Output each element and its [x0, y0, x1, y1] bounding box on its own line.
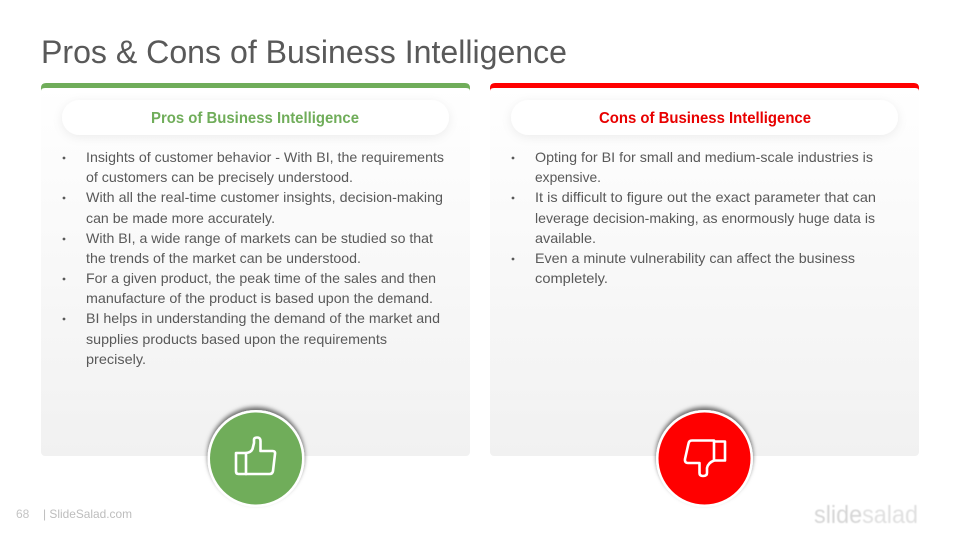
- pros top bar: [41, 83, 470, 91]
- cons top bar: [490, 83, 919, 91]
- page number: 68: [16, 507, 30, 521]
- cons bullet list: completely.: [535, 270, 608, 286]
- cons card background: [490, 86, 919, 456]
- logo: slidesalad: slidesalad: [814, 501, 918, 529]
- pros bullet list: the trends of the market can be understood.: [86, 250, 361, 266]
- pros bullet list: [63, 149, 444, 367]
- cons bullet list: It is difficult to figure out the exact parameter that can: [535, 189, 876, 205]
- pros heading pill: Pros of Business Intelligence: [151, 110, 359, 127]
- pros bullet list: With all the real-time customer insights, decision-making: [86, 189, 443, 205]
- cons heading pill: [511, 100, 898, 135]
- icon: thumbs up badge: [208, 410, 304, 507]
- pros bullet list: Insights of customer behavior - With BI, the requirements: [86, 149, 444, 165]
- title: Pros & Cons of Business Intelligence: [41, 34, 567, 70]
- footer brand text: | SlideSalad.com: [43, 507, 132, 521]
- pros bullet list: BI helps in understanding the demand of the market and: [86, 310, 440, 326]
- panel: cons: [490, 83, 919, 456]
- pros heading pill: [62, 100, 449, 135]
- pros bullet list: supplies products based upon the requirements: [86, 331, 387, 347]
- pros bullet list: For a given product, the peak time of the sales and then: [86, 270, 436, 286]
- cons bullet list: Even a minute vulnerability can affect the business: [535, 250, 855, 266]
- icon: thumbs down badge: [656, 410, 753, 507]
- cons bullet list: leverage decision-making, as enormously huge data is: [535, 210, 875, 226]
- icon: thumbs up glyph: [236, 438, 275, 474]
- icon: thumbs down glyph: [685, 440, 725, 476]
- pros bullet list: of customers can be precisely understood.: [86, 169, 353, 185]
- cons bullet list: expensive.: [535, 169, 601, 185]
- cons heading pill: Cons of Business Intelligence: [599, 110, 811, 127]
- pros card background: [41, 86, 470, 456]
- pros bullet list: precisely.: [86, 351, 146, 367]
- cons bullet list: [512, 149, 876, 286]
- cons bullet list: Opting for BI for small and medium-scale industries is: [535, 149, 873, 165]
- pros bullet list: manufacture of the product is based upon the demand.: [86, 290, 433, 306]
- pros bullet list: can be made more accurately.: [86, 210, 275, 226]
- cons bullet list: available.: [535, 230, 596, 246]
- panel: pros: [41, 83, 470, 456]
- pros bullet list: With BI, a wide range of markets can be studied so that: [86, 230, 433, 246]
